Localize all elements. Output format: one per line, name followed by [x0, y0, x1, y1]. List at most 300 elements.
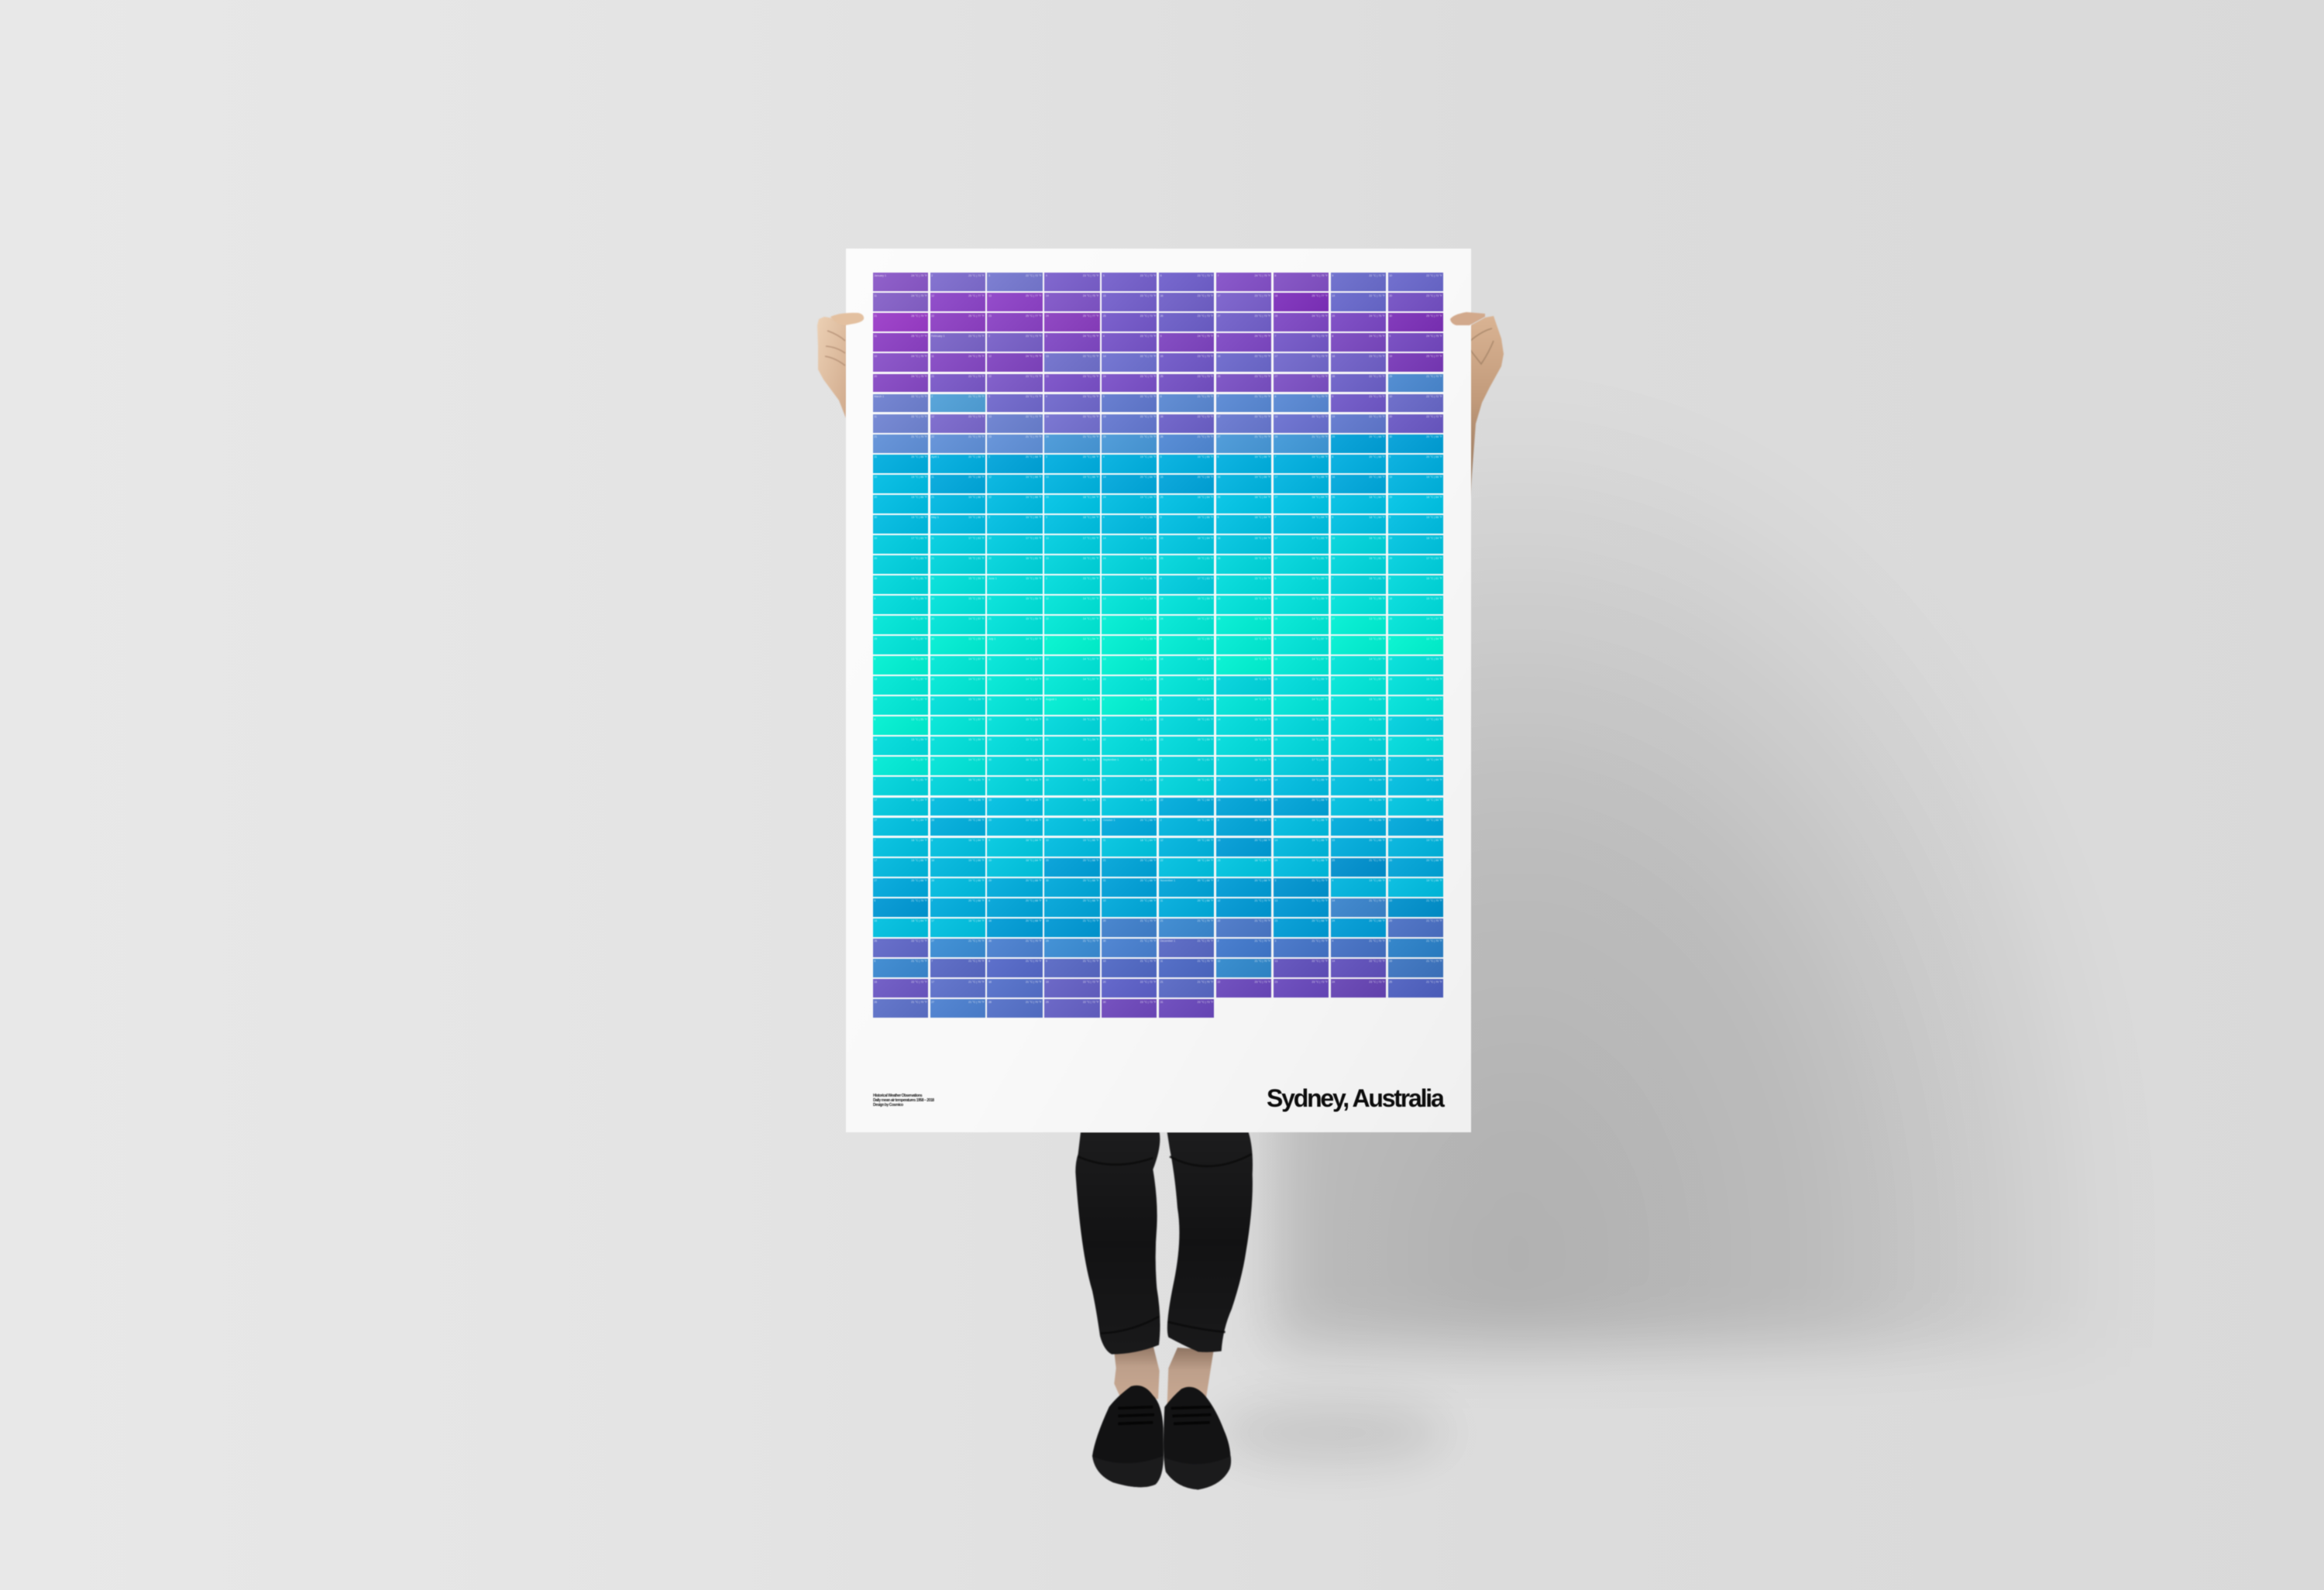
row: October 7-16: 9	[988, 839, 990, 842]
row: May 20-29: 16 °C | 61 °F	[1198, 557, 1213, 560]
row: June 29 - July 8: 12 °C | 54 °F	[1083, 637, 1098, 640]
row: April 10-19: 20 °C | 68 °F	[1198, 476, 1213, 479]
row: October 17-26	[873, 858, 1446, 877]
row: March 1-10	[872, 393, 1444, 413]
row: November 6-15: 20 °C | 68 °F	[968, 899, 985, 902]
row: November 16-25: 22	[1217, 919, 1220, 922]
row: April 30 - May 9: 18 °C | 64 °F	[1369, 516, 1385, 519]
row: November 26 - December 5: 21 °C | 70 °F	[1255, 939, 1270, 943]
row: October 17-26: 23	[1217, 859, 1220, 862]
row: December 16-25: 20	[1103, 980, 1106, 984]
row: July 9-18: 9	[874, 658, 875, 661]
row: June 9-18: 11	[988, 597, 992, 600]
row: March 11-20: 19	[1332, 415, 1335, 418]
row: October 7-16: 19 °C | 66 °F	[1198, 839, 1213, 842]
row: October 17-26: 21	[1103, 859, 1106, 862]
row: December 16-25: 21 °C | 70 °F	[968, 980, 985, 984]
row: September 17-26: 20 °C | 68 °F	[1198, 798, 1213, 802]
row: October 27 - November 5: November 1	[1160, 879, 1175, 882]
row: November 26 - December 5: 27	[931, 939, 934, 943]
row: September 17-26: 21	[1103, 798, 1106, 802]
row: June 9-18: 15 °C | 59 °F	[1255, 597, 1270, 600]
row: September 27 - October 6: 27	[874, 819, 877, 822]
left trouser leg	[1075, 1132, 1160, 1355]
row: January 21-30: 23 °C | 73 °F	[1255, 314, 1270, 318]
row: June 29 - July 8: 13 °C | 55 °F	[1369, 637, 1385, 640]
row: June 9-18: 10	[931, 597, 934, 600]
row: July 9-18: 17	[1332, 658, 1335, 661]
row: April 20-29: 19 °C | 66 °F	[1140, 496, 1156, 499]
row: January 1-10: 23 °C | 73 °F	[1083, 274, 1098, 277]
row: May 20-29: 23	[1046, 557, 1049, 560]
row: September 27 - October 6: 30	[1046, 819, 1049, 822]
row: August 18-27	[873, 737, 1446, 755]
row: October 7-16: 13	[1217, 839, 1220, 842]
footnote text: Historical Weather Observations	[873, 1094, 922, 1098]
row: October 17-26: 17	[874, 859, 877, 862]
row: April 30 - May 9: 7	[1274, 516, 1276, 519]
row: December 6-15: 21 °C | 70 °F	[911, 960, 927, 963]
row: August 8-17: 15 °C | 59 °F	[1140, 718, 1156, 721]
row: September 17-26	[873, 798, 1446, 816]
row: October 27 - November 5: 21 °C | 70 °F	[1312, 879, 1328, 882]
row: March 11-20: 15	[1103, 415, 1106, 418]
row: March 21-30: 24	[1046, 435, 1049, 438]
row: May 30 - June 8: 15 °C | 59 °F	[1312, 577, 1328, 580]
row: September 17-26: 20 °C | 68 °F	[1255, 798, 1270, 802]
row: January 31 - February 9: 24 °C | 75 °F	[1198, 335, 1213, 338]
row: August 28 - September 6: 28	[874, 758, 877, 761]
row: February 20-29: 23 °C | 73 °F	[1312, 375, 1328, 378]
row: May 10-19: 18 °C | 64 °F	[1255, 536, 1270, 539]
row: September 7-16: 16 °C | 61 °F	[968, 778, 985, 781]
row: March 11-20: 13	[988, 415, 992, 418]
row: January 11-20: 22 °C | 72 °F	[1369, 294, 1385, 297]
row: June 29 - July 8: 13 °C | 55 °F	[968, 637, 985, 640]
row: March 31 - April 9: 19 °C | 66 °F	[1140, 455, 1156, 458]
row: December 6-15: 21 °C | 70 °F	[1083, 960, 1098, 963]
row: December 16-25: 21	[1160, 980, 1164, 984]
row: July 9-18: 18	[1389, 658, 1392, 661]
row: July 19-28: 14 °C | 57 °F	[1026, 678, 1042, 681]
row: March 11-20: 22 °C | 72 °F	[911, 415, 927, 418]
row: February 20-29: 24	[1103, 375, 1106, 378]
row: July 19-28: 23	[1103, 678, 1106, 681]
row: July 19-28: 25	[1217, 678, 1220, 681]
row: August 8-17: 10	[988, 718, 992, 721]
row: August 18-27: 22	[1103, 738, 1106, 741]
row: July 19-28: 21	[988, 678, 992, 681]
row: December 6-15: 21 °C | 70 °F	[1026, 960, 1042, 963]
row: January 31 - February 9: 7	[1274, 335, 1276, 338]
row: October 17-26: 19 °C | 66 °F	[911, 859, 927, 862]
row: August 18-27: 15 °C | 59 °F	[1140, 738, 1156, 741]
row: August 8-17: 17 °C | 63 °F	[1426, 718, 1442, 721]
row: December 16-25: 17	[931, 980, 934, 984]
row: May 10-19: 14	[1103, 536, 1106, 539]
row: August 28 - September 6: 16 °C | 61 °F	[1140, 758, 1156, 761]
row: February 20-29: 24 °C | 75 °F	[911, 375, 927, 378]
row: January 1-10: 3	[988, 274, 990, 277]
row: November 26 - December 5: 30	[1103, 939, 1106, 943]
row: January 21-30: 23	[988, 314, 992, 318]
row: June 29 - July 8: July 1	[988, 637, 995, 640]
row: September 7-16: 12	[1160, 778, 1164, 781]
row: July 29 - August 7: 29	[874, 698, 877, 701]
row: July 29 - August 7: 13 °C | 55 °F	[1140, 698, 1156, 701]
row: April 30 - May 9: 19 °C | 66 °F	[1426, 516, 1442, 519]
row: January 1-10: 24 °C | 75 °F	[1312, 274, 1328, 277]
row: April 30 - May 9: 6	[1217, 516, 1219, 519]
row: March 31 - April 9: 4	[1103, 455, 1105, 458]
row: April 10-19: 19 °C | 66 °F	[1026, 476, 1042, 479]
row: May 10-19: 17 °C | 63 °F	[911, 536, 927, 539]
row: August 28 - September 6: 14 °C | 57 °F	[911, 758, 927, 761]
row: March 21-30: 27	[1217, 435, 1220, 438]
row: July 19-28: 15 °C | 59 °F	[1312, 678, 1328, 681]
row: April 20-29: 22	[988, 496, 992, 499]
row: October 27 - November 5: 27	[874, 879, 877, 882]
row: September 27 - October 6: 19 °C | 66 °F	[1312, 819, 1328, 822]
row: March 21-30: 21 °C | 70 °F	[1140, 435, 1156, 438]
row: January 31 - February 9: 24 °C | 75 °F	[1083, 335, 1098, 338]
row: July 9-18: 14 °C | 57 °F	[1026, 658, 1042, 661]
row: May 20-29: 20	[874, 557, 877, 560]
row: June 9-18: 15 °C | 59 °F	[1198, 597, 1213, 600]
row: September 17-26: 24	[1274, 798, 1277, 802]
row: February 10-19: 24 °C | 75 °F	[968, 355, 985, 358]
row: April 10-19: 14	[1103, 476, 1106, 479]
row: December 16-25: 21 °C | 70 °F	[1198, 980, 1213, 984]
row: June 29 - July 8: 4	[1160, 637, 1162, 640]
row: October 7-16: 18 °C | 64 °F	[911, 839, 927, 842]
row: May 20-29	[872, 555, 1444, 575]
row: January 11-20: 11	[874, 294, 877, 297]
row: May 20-29: 17 °C | 63 °F	[911, 557, 927, 560]
row: September 7-16: 8	[931, 778, 933, 781]
row: November 6-15: 21 °C | 70 °F	[911, 899, 927, 902]
row: November 26 - December 5: 21 °C | 70 °F	[1198, 939, 1213, 943]
row: January 11-20: 25 °C | 77 °F	[1312, 294, 1328, 297]
row: September 27 - October 6: 20 °C | 68 °F	[1140, 819, 1156, 822]
row: November 26 - December 5: 26	[874, 939, 877, 943]
row: January 1-10: 7	[1217, 274, 1219, 277]
row: March 1-10: 21 °C | 70 °F	[1312, 395, 1328, 398]
row: September 7-16: 10	[1046, 778, 1049, 781]
row: June 19-28: 24	[1160, 617, 1164, 620]
row: March 31 - April 9: 20 °C | 68 °F	[968, 455, 985, 458]
trouser creases	[1078, 1154, 1252, 1334]
row: March 31 - April 9: 5	[1160, 455, 1162, 458]
row: September 17-26: 18 °C | 64 °F	[1083, 798, 1098, 802]
row: October 7-16: 18 °C | 64 °F	[1026, 839, 1042, 842]
row: October 17-26: 21 °C | 70 °F	[1369, 859, 1385, 862]
row: January 21-30: 24 °C | 75 °F	[1312, 314, 1328, 318]
row: May 20-29: 24	[1103, 557, 1106, 560]
row: January 11-20	[872, 292, 1444, 312]
row: November 16-25: 21 °C | 70 °F	[1083, 919, 1098, 922]
row: March 11-20: 22 °C | 72 °F	[1140, 415, 1156, 418]
row: July 19-28: 28	[1389, 678, 1392, 681]
row: August 8-17: 15 °C | 59 °F	[1026, 718, 1042, 721]
row: March 11-20: 22 °C | 72 °F	[1083, 415, 1098, 418]
row: November 16-25: 16	[874, 919, 877, 922]
footnote text: Design by Cosmico	[873, 1103, 903, 1108]
row: June 9-18: 16	[1274, 597, 1277, 600]
row: November 26 - December 5: 21 °C | 70 °F	[1026, 939, 1042, 943]
row: March 1-10: 6	[1160, 395, 1162, 398]
row: July 19-28: 15 °C | 59 °F	[1426, 678, 1442, 681]
row: March 21-30: 22	[931, 435, 934, 438]
row: May 30 - June 8	[872, 575, 1444, 595]
row: March 11-20: 22 °C | 72 °F	[1198, 415, 1213, 418]
row: April 30 - May 9: 5	[1160, 516, 1162, 519]
row: November 16-25: 20 °C | 68 °F	[1369, 919, 1385, 922]
row: January 31 - February 9: 9	[1389, 335, 1391, 338]
row: April 20-29: 23	[1046, 496, 1049, 499]
shoe soles	[1093, 1456, 1231, 1489]
row: November 16-25: 20	[1103, 919, 1106, 922]
row: July 19-28	[873, 676, 1446, 695]
row: November 16-25: 20 °C | 68 °F	[1026, 919, 1042, 922]
row: September 7-16: 17 °C | 63 °F	[1140, 778, 1156, 781]
row: November 16-25: 23	[1274, 919, 1277, 922]
row: May 10-19: 15	[1160, 536, 1164, 539]
row: July 9-18: 14	[1160, 658, 1164, 661]
row: September 17-26: 18 °C | 64 °F	[1140, 798, 1156, 802]
row: July 19-28: 14 °C | 57 °F	[1083, 678, 1098, 681]
row: January 31 - February 9: February 1	[931, 335, 944, 338]
row: May 10-19: 10	[874, 536, 877, 539]
row: June 9-18: 15 °C | 59 °F	[911, 597, 927, 600]
row: June 29 - July 8: 30	[931, 637, 934, 640]
row: May 10-19: 18 °C | 64 °F	[1198, 536, 1213, 539]
row: January 31 - February 9: 23 °C | 73 °F	[1140, 335, 1156, 338]
row: January 21-30: 29	[1332, 314, 1335, 318]
row: August 18-27: 24	[1217, 738, 1220, 741]
row: October 17-26: 22	[1160, 859, 1164, 862]
row: March 1-10: 9	[1332, 395, 1333, 398]
row: March 31 - April 9: 31	[874, 455, 877, 458]
row: September 27 - October 6: 6	[1389, 819, 1391, 822]
row: May 10-19: 18 °C | 64 °F	[1140, 536, 1156, 539]
row: March 31 - April 9	[872, 454, 1444, 474]
row: April 20-29: 18 °C | 64 °F	[1426, 496, 1442, 499]
row: October 17-26: 24	[1274, 859, 1277, 862]
row: November 26 - December 5: 21 °C | 70 °F	[1083, 939, 1098, 943]
row: September 17-26: 19 °C | 66 °F	[968, 798, 985, 802]
row: April 30 - May 9: 3	[1046, 516, 1047, 519]
row: December 6-15: 21 °C | 70 °F	[1255, 960, 1270, 963]
row: July 19-28: 22	[1046, 678, 1049, 681]
row: January 21-30: 22	[931, 314, 934, 318]
row: May 20-29: 25	[1160, 557, 1164, 560]
row: January 11-20: 23 °C | 73 °F	[1140, 294, 1156, 297]
row: February 10-19: 24 °C | 75 °F	[911, 355, 927, 358]
row: August 8-17: 14 °C | 57 °F	[968, 718, 985, 721]
row: March 31 - April 9: 9	[1389, 455, 1391, 458]
row: June 19-28	[872, 615, 1444, 635]
row: January 11-20: 23 °C | 73 °F	[1426, 294, 1442, 297]
row: August 18-27: 15 °C | 59 °F	[1426, 738, 1442, 741]
row: July 19-28: 14 °C | 57 °F	[911, 678, 927, 681]
row: December 16-25: 25	[1389, 980, 1392, 984]
row: January 1-10: 2	[931, 274, 933, 277]
row: March 21-30: 20 °C | 68 °F	[1369, 435, 1385, 438]
row: July 19-28: 26	[1274, 678, 1277, 681]
row: September 27 - October 6: 5	[1332, 819, 1333, 822]
row: May 10-19: 16	[1217, 536, 1220, 539]
row: April 20-29: 24	[1103, 496, 1106, 499]
row: January 21-30: 24 °C | 75 °F	[1369, 314, 1385, 318]
row: January 31 - February 9: 24 °C | 75 °F	[1426, 335, 1442, 338]
row: March 31 - April 9: 20 °C | 68 °F	[1083, 455, 1098, 458]
row: November 6-15: 14	[1332, 899, 1335, 902]
row: January 31 - February 9: 3	[1046, 335, 1047, 338]
row: April 20-29: 19 °C | 66 °F	[968, 496, 985, 499]
poster	[846, 249, 1470, 1132]
row: May 20-29: 16 °C | 61 °F	[1312, 557, 1328, 560]
row: October 27 - November 5: 20 °C | 68 °F	[1083, 879, 1098, 882]
row: June 19-28: 13 °C | 55 °F	[1140, 617, 1156, 620]
row: August 8-17: 16	[1332, 718, 1335, 721]
right shoe	[1164, 1387, 1231, 1489]
right hand finger creases	[1470, 328, 1494, 364]
row: September 27 - October 6: 2	[1160, 819, 1162, 822]
row: October 7-16: 15	[1332, 839, 1335, 842]
row: June 9-18: 14 °C | 57 °F	[1140, 597, 1156, 600]
row: September 17-26: 18 °C | 64 °F	[911, 798, 927, 802]
row: January 1-10: 9	[1332, 274, 1333, 277]
row: October 27 - November 5: 20 °C | 68 °F	[1255, 879, 1270, 882]
row: October 17-26: 18 °C | 64 °F	[1198, 859, 1213, 862]
row: August 28 - September 6: 18 °C | 64 °F	[1369, 758, 1385, 761]
row: November 26 - December 5: 21 °C | 70 °F	[1369, 939, 1385, 943]
row: January 21-30: 28	[1274, 314, 1277, 318]
row: May 20-29: 16 °C | 61 °F	[968, 557, 985, 560]
row: July 29 - August 7: 2	[1103, 698, 1105, 701]
row: November 26 - December 5: 3	[1274, 939, 1276, 943]
row: January 21-30: 25 °C | 77 °F	[1026, 314, 1042, 318]
row: September 27 - October 6: 28	[931, 819, 934, 822]
row: July 29 - August 7: 6	[1332, 698, 1333, 701]
row: May 10-19: 13	[1046, 536, 1049, 539]
row: August 8-17: 15	[1274, 718, 1277, 721]
row: November 26 - December 5: 21 °C | 70 °F	[1426, 939, 1442, 943]
row: April 10-19: 17	[1274, 476, 1277, 479]
row: July 19-28: 14 °C | 57 °F	[1140, 678, 1156, 681]
row: March 21-30: 25	[1103, 435, 1106, 438]
row: January 11-20: 15	[1103, 294, 1106, 297]
row: February 10-19: 15	[1160, 355, 1164, 358]
row: October 27 - November 5: 3	[1274, 879, 1276, 882]
row: February 10-19: 25 °C | 77 °F	[1426, 355, 1442, 358]
row: August 28 - September 6: 14 °C | 57 °F	[968, 758, 985, 761]
row: July 9-18: 15	[1217, 658, 1220, 661]
row: October 7-16: 11	[1103, 839, 1105, 842]
row: February 10-19: 22 °C | 72 °F	[1083, 355, 1098, 358]
row: June 29 - July 8: 8	[1389, 637, 1391, 640]
row: January 11-20: 23 °C | 73 °F	[1198, 294, 1213, 297]
row: August 28 - September 6: 6	[1389, 758, 1391, 761]
row: October 27 - November 5: 19 °C | 66 °F	[1426, 879, 1442, 882]
row: December 26-31: 23 °C | 73 °F	[1198, 1001, 1213, 1004]
row: March 1-10: 8	[1274, 395, 1276, 398]
left thumb	[830, 313, 864, 325]
row: August 18-27: 16 °C | 61 °F	[1312, 738, 1328, 741]
row: April 10-19: 20 °C | 68 °F	[1369, 476, 1385, 479]
row: June 19-28: 27	[1332, 617, 1335, 620]
row: December 16-25: 16	[874, 980, 877, 984]
row: November 26 - December 5: 4	[1332, 939, 1333, 943]
row: January 21-30: 26 °C | 79 °F	[911, 314, 927, 318]
row: November 6-15: 10	[1103, 899, 1106, 902]
row: April 10-19: 18	[1332, 476, 1335, 479]
row: June 29 - July 8: 14 °C | 57 °F	[911, 637, 927, 640]
row: March 11-20: 22 °C | 72 °F	[1426, 415, 1442, 418]
row: January 21-30: 25 °C | 77 °F	[1083, 314, 1098, 318]
row: June 9-18: 18	[1389, 597, 1392, 600]
row: July 19-28: 20	[931, 678, 934, 681]
row: July 29 - August 7: 15 °C | 59 °F	[968, 698, 985, 701]
row: September 27 - October 6: October 1	[1103, 819, 1115, 822]
row: February 10-19: 14	[1103, 355, 1106, 358]
row: December 26-31: 21 °C | 70 °F	[1026, 1001, 1042, 1004]
row: January 1-10	[872, 272, 1444, 292]
row: December 6-15: 14	[1332, 960, 1335, 963]
row: April 10-19: 19 °C | 66 °F	[1426, 476, 1442, 479]
row: March 31 - April 9: 20 °C | 68 °F	[1426, 455, 1442, 458]
row: October 7-16	[873, 838, 1446, 857]
row: June 9-18: 15 °C | 59 °F	[1369, 597, 1385, 600]
row: August 28 - September 6: 31	[1046, 758, 1049, 761]
row: November 6-15	[873, 898, 1446, 917]
row: December 16-25: 24	[1332, 980, 1335, 984]
row: April 10-19: 10	[874, 476, 877, 479]
row: February 10-19: 22 °C | 72 °F	[1255, 355, 1270, 358]
row: October 27 - November 5: 20 °C | 68 °F	[911, 879, 927, 882]
row: November 6-15: 21 °C | 70 °F	[1369, 899, 1385, 902]
row: January 31 - February 9: 31	[874, 335, 877, 338]
row: April 20-29: 25	[1160, 496, 1164, 499]
row: April 20-29: 18 °C | 64 °F	[1198, 496, 1213, 499]
row: May 20-29: 28	[1332, 557, 1335, 560]
row: October 27 - November 5: 20 °C | 68 °F	[1140, 879, 1156, 882]
row: June 9-18: 15 °C | 59 °F	[968, 597, 985, 600]
row: May 30 - June 8: 15 °C | 59 °F	[1026, 577, 1042, 580]
row: April 20-29: 28	[1332, 496, 1335, 499]
row: October 27 - November 5: 31	[1103, 879, 1106, 882]
row: April 10-19: 19	[1389, 476, 1392, 479]
row: May 30 - June 8: 16 °C | 61 °F	[1140, 577, 1156, 580]
row: September 17-26: 25	[1332, 798, 1335, 802]
row: April 10-19: 11	[931, 476, 934, 479]
row: July 19-28: 14 °C | 57 °F	[1369, 678, 1385, 681]
row: November 6-15: 6	[874, 899, 875, 902]
row: April 10-19: 13	[1046, 476, 1049, 479]
row: July 19-28: 16 °C | 61 °F	[1255, 678, 1270, 681]
row: August 28 - September 6: 18 °C | 64 °F	[1426, 758, 1442, 761]
row: June 29 - July 8: 14 °C | 57 °F	[1026, 637, 1042, 640]
row: May 20-29: 26	[1217, 557, 1220, 560]
row: December 6-15: 6	[874, 960, 875, 963]
row: January 11-20: 25 °C | 77 °F	[968, 294, 985, 297]
row: January 31 - February 9: 23 °C | 73 °F	[1312, 335, 1328, 338]
row: April 10-19: 16	[1217, 476, 1220, 479]
row: June 29 - July 8: 29	[874, 637, 877, 640]
row: June 19-28: 22	[1046, 617, 1049, 620]
row: February 20-29: 26	[1217, 375, 1220, 378]
